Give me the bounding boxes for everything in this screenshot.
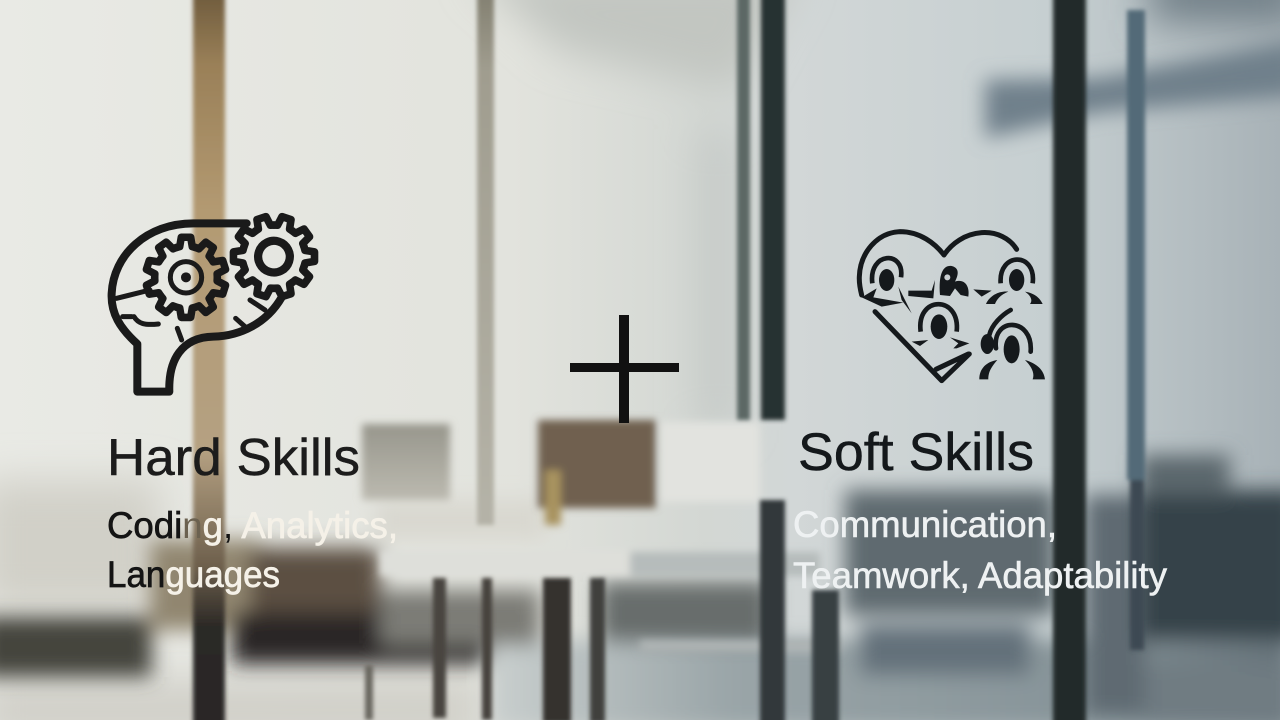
person top center bbox=[908, 266, 969, 298]
text: hard skills list: Coding, Analytics, bbox=[107, 505, 398, 546]
vertical glass frames bbox=[193, 0, 1145, 720]
large gear bbox=[222, 205, 326, 308]
person top right bbox=[973, 260, 1043, 304]
text: hard skills list bbox=[107, 505, 398, 595]
person top left bbox=[862, 258, 912, 313]
icon: brain with gears bbox=[112, 205, 326, 392]
text: hard skills list: Languages bbox=[107, 554, 280, 595]
person bottom center bbox=[912, 304, 969, 348]
person bottom right bbox=[979, 310, 1045, 379]
icon: plus sign bbox=[570, 315, 679, 423]
heading: Soft Skills: Soft Skills bbox=[798, 423, 1034, 482]
text: soft skills list: Communication, bbox=[793, 504, 1057, 545]
text: soft skills list bbox=[793, 504, 1167, 596]
heart outline bbox=[859, 232, 1017, 381]
small gear bbox=[145, 237, 227, 317]
heading: Hard Skills: Hard Skills bbox=[107, 429, 360, 487]
text: soft skills list: Teamwork, Adaptability bbox=[793, 555, 1167, 596]
brain fold lines bbox=[117, 290, 265, 340]
icon: heart with people bbox=[859, 232, 1045, 381]
brain outline bbox=[112, 223, 282, 392]
